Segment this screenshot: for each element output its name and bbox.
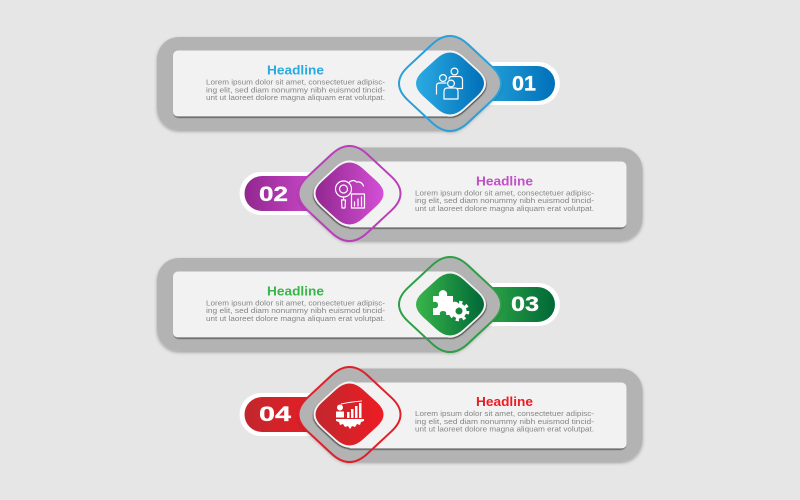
number 02: 02	[259, 182, 288, 206]
body text 04: Lorem ipsum dolor sit amet, consectetuer adipisc-	[415, 409, 594, 418]
body text 03	[206, 298, 386, 323]
white card 04	[314, 381, 626, 448]
number pill 02	[240, 172, 330, 215]
diamond outline 03	[399, 257, 501, 352]
icon: people	[436, 68, 462, 99]
diamond outline 01	[399, 36, 501, 131]
gray frame 04	[298, 367, 642, 462]
body text 02: unt ut laoreet dolore magna aliquam erat volutpat.	[415, 204, 594, 213]
body text 02	[415, 188, 595, 213]
body text 01	[206, 78, 386, 102]
icon: chart on gear	[336, 401, 364, 429]
body text 03: ing elit, sed diam nonummy nibh euismod tincid-	[206, 306, 386, 315]
diamond badge 02	[316, 162, 384, 224]
panel: step 03	[157, 257, 560, 352]
panel: step 04	[240, 367, 642, 462]
gray frame 02	[298, 146, 642, 241]
shapes: step 04 frame	[240, 367, 642, 462]
headline 01: Headline	[267, 64, 324, 78]
body text 01: unt ut laoreet dolore magna aliquam erat volutpat.	[206, 93, 385, 102]
number 01: 01	[512, 72, 536, 96]
number 04: 04	[259, 402, 291, 426]
body text 04: ing elit, sed diam nonummy nibh euismod tincid-	[415, 417, 595, 426]
white card 01	[173, 50, 486, 117]
diamond outline 02	[298, 146, 400, 241]
gray frame 03	[157, 257, 501, 352]
diamond outline 04	[298, 367, 400, 462]
panel: step 01	[157, 36, 560, 131]
icon: puzzle and gear	[433, 290, 468, 320]
headline 03: Headline	[267, 284, 324, 298]
body text 04	[415, 409, 595, 434]
headline 02: Headline	[476, 174, 533, 188]
body text 03: unt ut laoreet dolore magna aliquam erat volutpat.	[206, 314, 385, 323]
icon: analysis	[336, 180, 364, 208]
gray frame 01	[157, 36, 501, 131]
diamond badge 04	[316, 384, 384, 446]
shapes: step 03 frame	[157, 257, 560, 352]
diamond badge 01	[416, 52, 484, 114]
body text 04: unt ut laoreet dolore magna aliquam erat volutpat.	[415, 424, 594, 434]
diamond badge 03	[416, 274, 484, 336]
body text 02: ing elit, sed diam nonummy nibh euismod tincid-	[415, 196, 595, 205]
body text 01: Lorem ipsum dolor sit amet, consectetuer adipisc-	[206, 78, 385, 86]
body text 01: ing elit, sed diam nonummy nibh euismod tincid-	[206, 85, 386, 94]
white card 02	[314, 160, 626, 228]
shapes: step 02 frame	[240, 146, 642, 241]
white card 03	[173, 271, 486, 338]
number pill 04	[240, 393, 330, 436]
shapes: step 01 frame	[157, 36, 560, 131]
body text 03: Lorem ipsum dolor sit amet, consectetuer adipisc-	[206, 298, 385, 307]
headline 04: Headline	[476, 395, 533, 409]
number 03: 03	[511, 292, 539, 316]
number pill 03	[470, 283, 560, 326]
body text 02: Lorem ipsum dolor sit amet, consectetuer adipisc-	[415, 188, 594, 197]
number pill 01	[470, 62, 560, 105]
panel: step 02	[240, 146, 642, 241]
